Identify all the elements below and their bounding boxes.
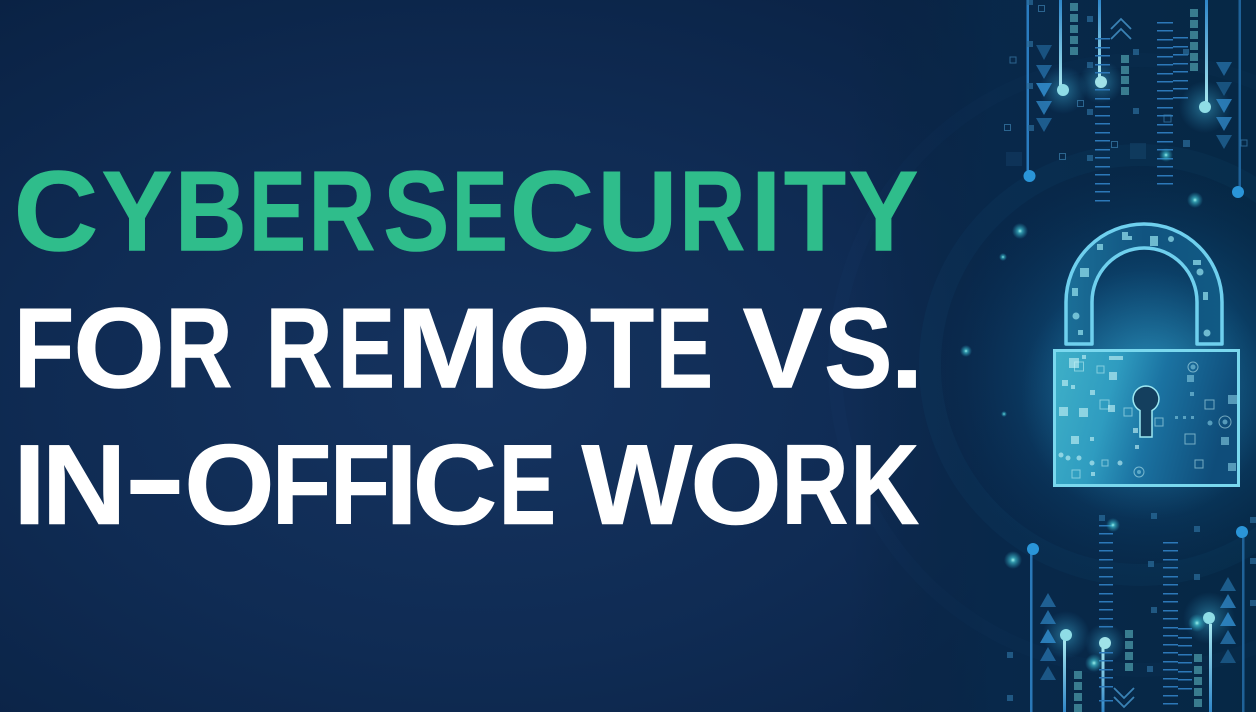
title line 1: CYBERSECURITY: T — [784, 148, 846, 276]
chevrons: bottom — [1114, 688, 1134, 707]
title line 2: FOR REMOTE VS.: E — [656, 286, 713, 412]
padlock shackle — [1066, 224, 1222, 344]
chevrons: top — [1111, 19, 1131, 39]
padlock — [1021, 224, 1256, 520]
title line 1: CYBERSECURITY: R — [679, 148, 746, 276]
title line 2: FOR REMOTE VS.: V — [742, 286, 823, 412]
title line 1: CYBERSECURITY: Y — [848, 148, 919, 276]
title line 2: FOR REMOTE VS.: . — [890, 286, 924, 412]
tick columns: bottom — [1099, 525, 1192, 704]
arrow triangles: bottom — [1040, 577, 1236, 680]
title line 2: FOR REMOTE VS.: O — [73, 286, 165, 412]
teal block columns: bottom — [1074, 630, 1202, 712]
title line 3: IN-OFFICE WORK: C — [412, 422, 498, 549]
title line 1: CYBERSECURITY: C — [14, 148, 98, 276]
teal block columns: top — [1070, 3, 1198, 95]
title line 3: IN-OFFICE WORK: F — [330, 422, 390, 549]
keyhole — [1133, 386, 1159, 437]
title line 2: FOR REMOTE VS.: O — [498, 286, 591, 412]
title line 3: IN-OFFICE WORK: O — [690, 422, 782, 549]
title line 3: IN-OFFICE WORK: - — [124, 414, 186, 542]
circuit texture — [1058, 355, 1139, 476]
title line 1: CYBERSECURITY: I — [751, 148, 782, 276]
title line 3: IN-OFFICE WORK: I — [385, 422, 418, 549]
title line 3: IN-OFFICE WORK: W — [581, 422, 693, 549]
scattered squares: bottom — [1007, 513, 1256, 701]
scattered squares: top — [1006, 0, 1190, 166]
title line 3: IN-OFFICE WORK: I — [13, 422, 46, 549]
title line 3: IN-OFFICE WORK: N — [42, 422, 127, 549]
title line 2: FOR REMOTE VS.: M — [396, 286, 501, 412]
title line 2: FOR REMOTE VS.: R — [165, 286, 233, 412]
sparkles: top — [1012, 148, 1203, 239]
title line 2: FOR REMOTE VS.: E — [338, 286, 395, 412]
title line 2: FOR REMOTE VS.: R — [265, 286, 333, 412]
title line 3: IN-OFFICE WORK: E — [499, 422, 556, 549]
sparkles: bottom — [960, 253, 1206, 672]
padlock body — [1054, 350, 1238, 486]
title line 2: FOR REMOTE VS.: S — [824, 286, 893, 412]
title line 1: CYBERSECURITY: Y — [101, 148, 173, 276]
title line 1: CYBERSECURITY: R — [308, 148, 376, 276]
title — [13, 148, 924, 549]
title line 3: IN-OFFICE WORK: R — [781, 422, 849, 549]
title line 1: CYBERSECURITY: C — [510, 148, 594, 276]
circuit graphics: top — [1004, 0, 1247, 239]
title line 1: CYBERSECURITY: S — [383, 148, 450, 276]
title line 3: IN-OFFICE WORK: F — [272, 422, 331, 549]
arrow triangles: top — [1036, 45, 1232, 149]
title line 3: IN-OFFICE WORK: O — [184, 422, 275, 549]
title line 2: FOR REMOTE VS.: F — [14, 286, 74, 412]
tick columns: top — [1095, 22, 1188, 202]
padlock halo — [1021, 270, 1256, 520]
title line 1: CYBERSECURITY: E — [452, 148, 508, 276]
title line 3: IN-OFFICE WORK: K — [850, 422, 920, 549]
title line 1: CYBERSECURITY: B — [175, 148, 247, 276]
circuit lines and nodes: bottom — [1027, 526, 1248, 712]
title line 1: CYBERSECURITY: E — [249, 148, 306, 276]
title line 1: CYBERSECURITY: U — [597, 148, 678, 276]
circuit lines and nodes: top — [1024, 0, 1244, 198]
circuit graphics: bottom — [960, 253, 1256, 712]
title line 2: FOR REMOTE VS.: T — [590, 286, 654, 412]
